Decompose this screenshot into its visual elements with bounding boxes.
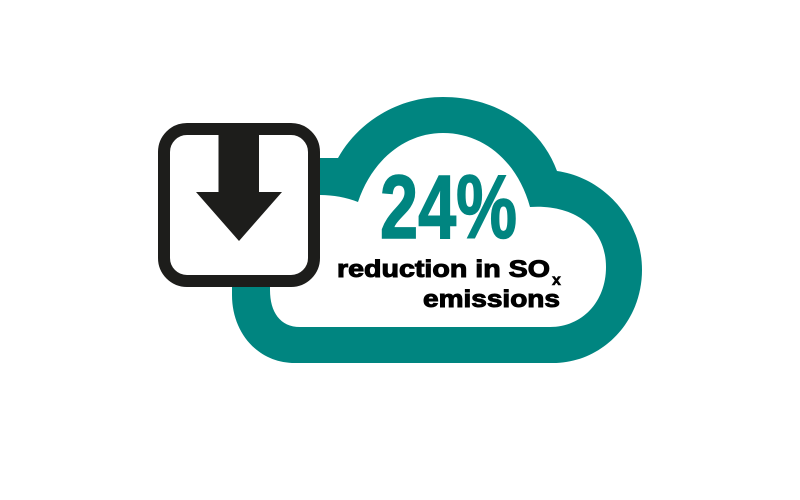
text: reduction in SOx emissions (337, 256, 561, 313)
text: reduction in SOx emissions: reduction in SO (337, 256, 550, 283)
text: reduction in SOx emissions: x (552, 272, 561, 289)
icon: teal cloud outline (232, 97, 642, 363)
text: reduction in SOx emissions: emissions (423, 286, 560, 313)
heading: 24%: 24% (380, 158, 517, 258)
icon: down arrow in rounded square (164, 129, 314, 281)
